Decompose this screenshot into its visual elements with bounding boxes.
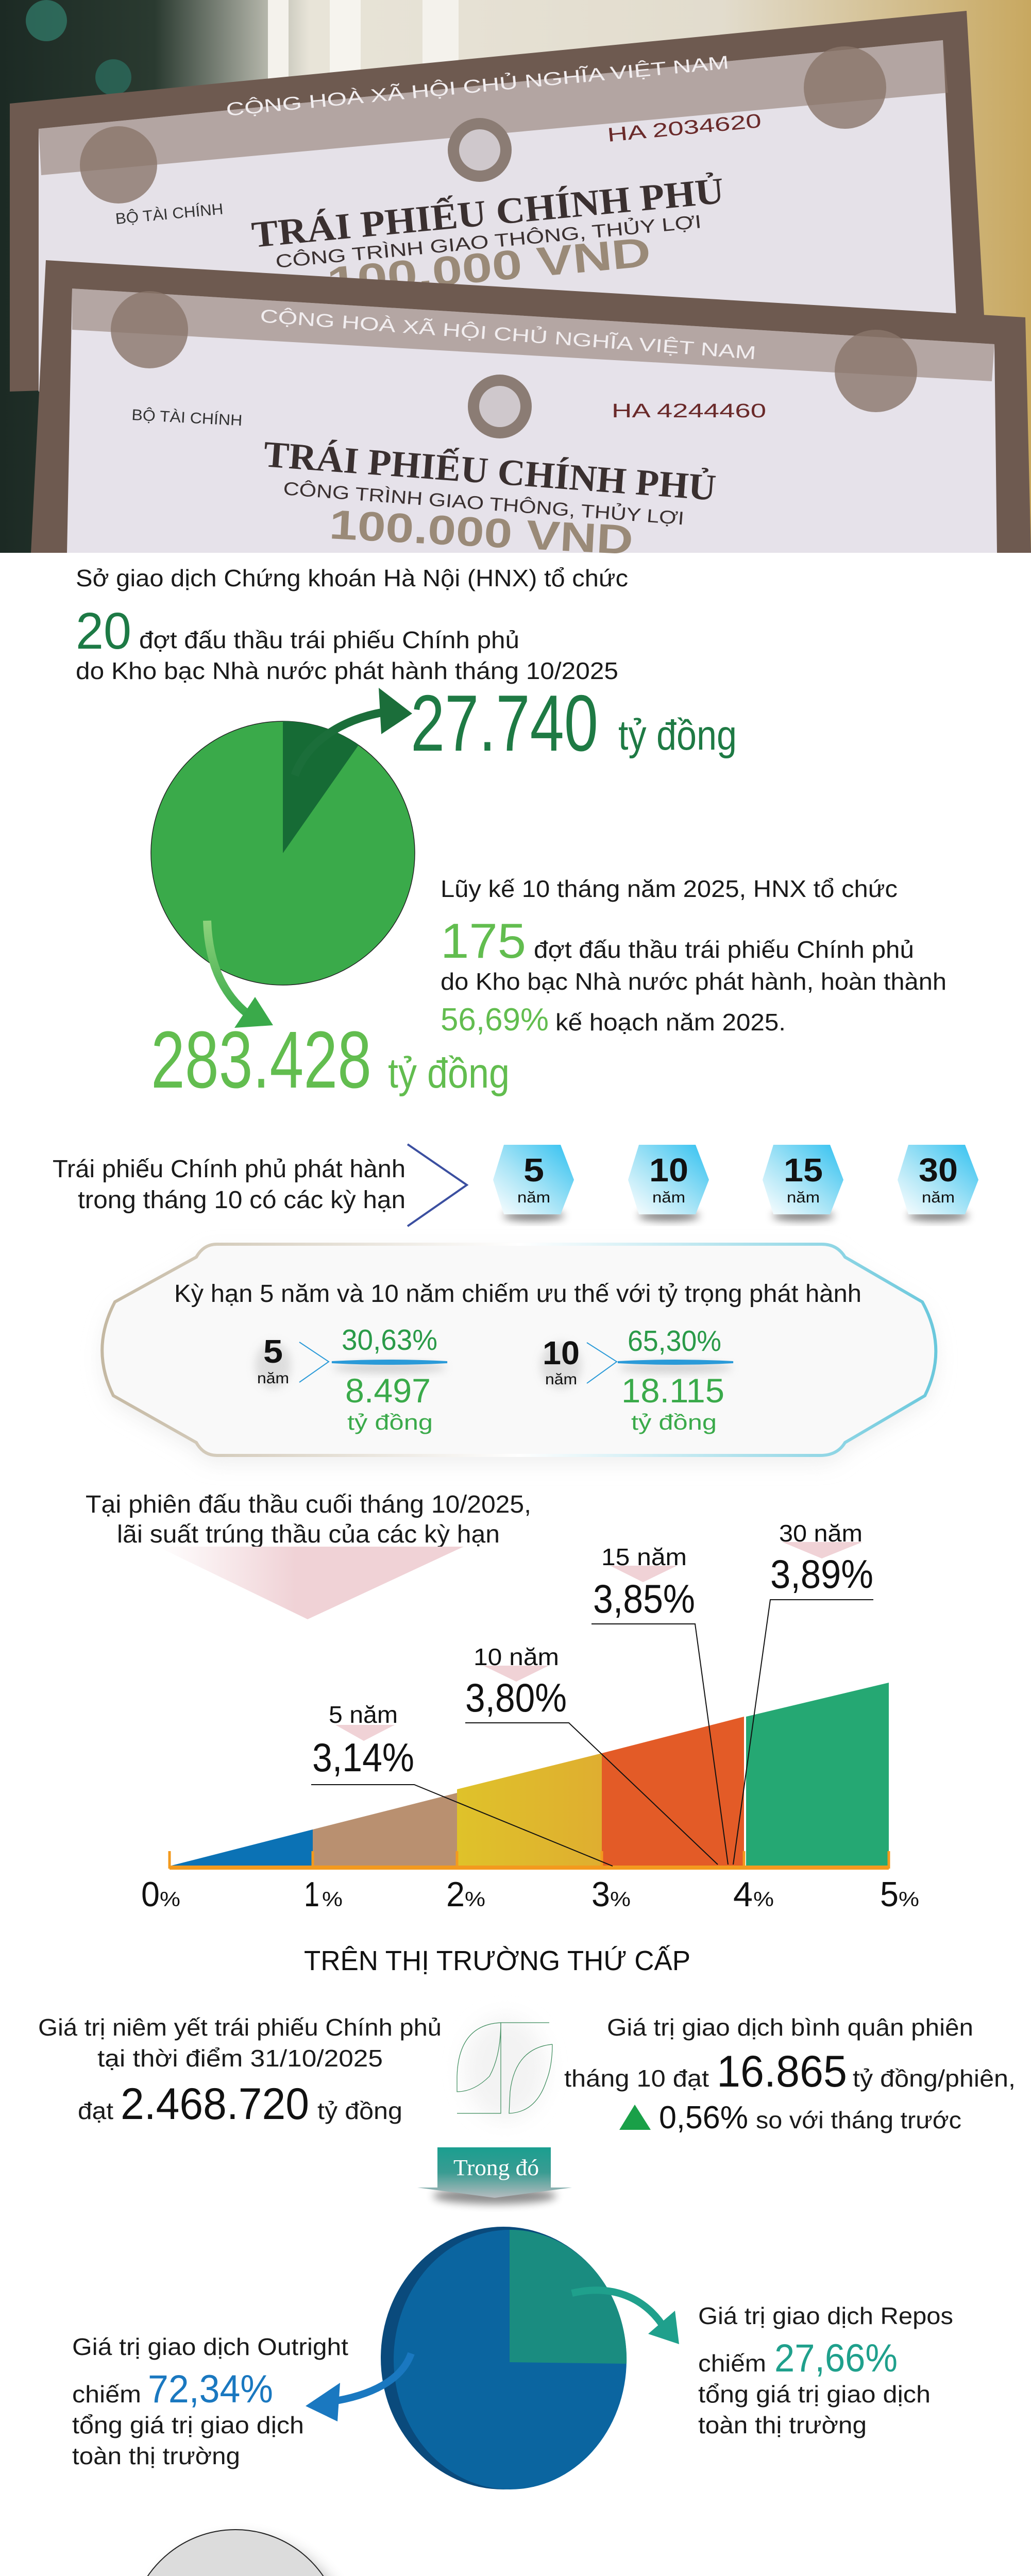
bond 2: CÔNG TRÌNH GIAO THÔNG, THỦY LỢI: [282, 477, 685, 529]
axis labels: %: [753, 1888, 774, 1911]
badge: 15 năm: [763, 1145, 843, 1221]
callout: 5 năm 3,14%: [311, 1701, 613, 1866]
axis labels: 4: [733, 1875, 753, 1914]
callout: 15 năm 3,85%: [591, 1544, 728, 1865]
badge: 30 năm: năm: [922, 1189, 955, 1206]
bond 2: TRÁI PHIẾU CHÍNH PHỦ: [262, 433, 717, 509]
text block: listed value: đạt: [78, 2097, 113, 2124]
text: cumulative 10 months: [441, 875, 947, 1038]
stat: 5 năm: 5: [263, 1333, 283, 1370]
axis labels: 5: [880, 1875, 899, 1914]
bond 2: BỘ TÀI CHÍNH: [131, 406, 243, 429]
pie chart: outright vs repos: [381, 2227, 627, 2489]
bond 1: HA 2034620: [606, 110, 763, 146]
axis labels: %: [610, 1888, 631, 1911]
bond 2: 100.000 VND: [328, 501, 634, 563]
bond 1: 100.000 VND: [325, 229, 653, 305]
text: bond terms: trong tháng 10 có các kỳ hạn: [78, 1187, 405, 1214]
big number: 27.740 tỷ đồng: tỷ đồng: [618, 712, 737, 759]
text: bond terms: Trái phiếu Chính phủ phát hành: [53, 1156, 405, 1183]
label: Trong đó: Trong đó: [453, 2155, 539, 2180]
text block: listed value: tại thời điểm 31/10/2025: [97, 2045, 383, 2072]
callout: 5 năm 3,14%: 5 năm: [329, 1701, 398, 1728]
heading: winning rates: Tại phiên đấu thầu cuối tháng 10/2025,: [86, 1491, 531, 1518]
text block: repos: toàn thị trường: [698, 2412, 867, 2438]
stat: 5 năm: 30,63%: [342, 1324, 437, 1357]
text block: outright: tổng giá trị giao dịch: [72, 2412, 304, 2438]
bond 2: CỘNG HOÀ XÃ HỘI CHỦ NGHĨA VIỆT NAM: [259, 304, 757, 363]
bond 1: CỘNG HOÀ XÃ HỘI CHỦ NGHĨA VIỆT NAM: [225, 51, 730, 120]
text block: average trading value: 0,56%: [659, 2100, 748, 2136]
heading: winning rates: [86, 1491, 531, 1548]
text: bond terms: [53, 1156, 405, 1214]
text block: average trading value: Giá trị giao dịch bình quân phiên: [607, 2014, 973, 2041]
bond 1: TRÁI PHIẾU CHÍNH PHỦ: [250, 170, 725, 256]
heading: winning rates: lãi suất trúng thầu của các kỳ hạn: [117, 1521, 500, 1548]
text block: listed value: Giá trị niêm yết trái phiếu Chính phủ: [38, 2014, 442, 2041]
text block: average trading value: 16.865: [717, 2047, 847, 2096]
callout: 15 năm 3,85%: 15 năm: [601, 1544, 687, 1570]
heading: HNX organized: do Kho bạc Nhà nước phát hành tháng 10/2025: [76, 657, 618, 684]
text block: average trading value: [564, 2014, 1016, 2136]
heading: HNX organized: 20: [76, 602, 131, 660]
axis labels: %: [160, 1888, 180, 1911]
axis labels: 2: [446, 1875, 465, 1914]
badge: 15 năm: 15: [784, 1151, 823, 1189]
text block: repos: tổng giá trị giao dịch: [698, 2381, 931, 2408]
text block: outright: Giá trị giao dịch Outright: [72, 2333, 348, 2360]
section heading: secondary market: TRÊN THỊ TRƯỜNG THỨ CẤP: [304, 1945, 690, 1976]
stat: 10 năm: 18.115: [621, 1371, 724, 1410]
text block: outright: [72, 2333, 348, 2469]
stat: 5 năm: năm: [257, 1370, 289, 1387]
badge: 5 năm: [493, 1145, 574, 1221]
text: cumulative 10 months: kế hoạch năm 2025.: [555, 1009, 786, 1036]
pie chart: foreign investors: [129, 2530, 355, 2576]
callout: 30 năm 3,89%: 3,89%: [770, 1551, 873, 1597]
big number: 27.740 tỷ đồng: 27.740: [411, 679, 598, 768]
text block: average trading value: tỷ đồng/phiên,: [853, 2065, 1016, 2092]
icon: pink triangle pointer: [158, 1547, 464, 1619]
arrow: chevron: [408, 1144, 467, 1226]
text block: average trading value: tháng 10 đạt: [564, 2065, 709, 2092]
text: cumulative 10 months: 175: [441, 913, 526, 969]
callout: 30 năm 3,89%: 30 năm: [779, 1520, 863, 1547]
bond 1: [10, 11, 987, 392]
text: cumulative 10 months: do Kho bạc Nhà nước phát hành, hoàn thành: [441, 968, 947, 995]
callout: 30 năm 3,89%: [733, 1520, 873, 1865]
arrow: to 27.740: [295, 688, 412, 775]
badge: 30 năm: [898, 1145, 978, 1221]
text: cumulative 10 months: 56,69%: [441, 1002, 549, 1038]
bond 1: BỘ TÀI CHÍNH: [114, 200, 224, 228]
text block: repos: 27,66%: [774, 2336, 898, 2380]
text block: repos: [698, 2302, 953, 2438]
stat: 10 năm: [540, 1325, 733, 1434]
heading: HNX organized: Sở giao dịch Chứng khoán Hà Nội (HNX) tổ chức: [76, 565, 628, 591]
bond 2: [31, 260, 1031, 563]
stat: 5 năm: tỷ đồng: [347, 1410, 433, 1434]
axis: [170, 1851, 889, 1869]
icon: up triangle: [619, 2105, 651, 2130]
badge: 30 năm: 30: [919, 1151, 958, 1189]
text block: listed value: tỷ đồng: [317, 2097, 402, 2124]
axis labels: 1: [304, 1875, 319, 1914]
text block: listed value: [38, 2014, 442, 2129]
callout: 5 năm 3,14%: 3,14%: [312, 1735, 414, 1780]
text block: outright: chiếm: [72, 2381, 141, 2408]
badge: 10 năm: [628, 1145, 709, 1221]
big number: 283.428 tỷ đồng: tỷ đồng: [388, 1050, 510, 1097]
heading: HNX organized: đợt đấu thầu trái phiếu Chính phủ: [139, 626, 519, 653]
callout: 10 năm 3,80%: 10 năm: [474, 1643, 559, 1670]
stat: 10 năm: năm: [545, 1371, 577, 1388]
big number: 283.428 tỷ đồng: 283.428: [151, 1015, 371, 1105]
badges: terms 5/10/15/30: [493, 1145, 978, 1221]
axis labels: [141, 1875, 919, 1914]
badge: 5 năm: 5: [523, 1151, 544, 1189]
text block: listed value: 2.468.720: [121, 2079, 309, 2129]
panel heading: Kỳ hạn 5 năm và 10 năm chiếm ưu thế với tỷ trọng phát hành: [174, 1280, 861, 1308]
stat: 10 năm: 65,30%: [628, 1325, 721, 1358]
stat: 10 năm: tỷ đồng: [631, 1410, 717, 1434]
badge: 10 năm: năm: [652, 1189, 685, 1206]
stat: 10 năm: 10: [543, 1334, 580, 1371]
axis labels: %: [322, 1888, 343, 1911]
axis labels: %: [899, 1888, 919, 1911]
text: cumulative 10 months: Lũy kế 10 tháng năm 2025, HNX tổ chức: [441, 875, 898, 902]
label: Trong đó: [417, 2147, 572, 2204]
icon: decorative swirl: [457, 2017, 552, 2120]
text block: average trading value: so với tháng trước: [756, 2107, 961, 2133]
stat: 5 năm: [255, 1324, 447, 1434]
heading: HNX organized: [76, 565, 628, 684]
badge: 15 năm: năm: [787, 1189, 820, 1206]
stat: 5 năm: 8.497: [345, 1371, 431, 1410]
callout: 10 năm 3,80%: 3,80%: [465, 1675, 567, 1720]
text block: repos: Giá trị giao dịch Repos: [698, 2302, 953, 2329]
callout: 15 năm 3,85%: 3,85%: [593, 1576, 695, 1621]
callout: 10 năm 3,80%: [465, 1643, 718, 1865]
text: cumulative 10 months: đợt đấu thầu trái phiếu Chính phủ: [534, 936, 914, 963]
bond 2: HA 4244460: [612, 400, 766, 422]
axis labels: 0: [141, 1875, 160, 1914]
chart: interest rate wedge: [141, 1683, 919, 1914]
photo: government bonds: [0, 0, 1031, 563]
arrow: to 283.428: [207, 921, 273, 1028]
panel: 5 and 10 year share: [102, 1244, 936, 1463]
badge: 10 năm: 10: [649, 1151, 688, 1189]
text block: outright: toàn thị trường: [72, 2443, 240, 2469]
text block: outright: 72,34%: [148, 2367, 273, 2411]
text block: repos: chiếm: [698, 2350, 766, 2377]
arrow: to repos: [572, 2290, 679, 2344]
badge: 5 năm: năm: [517, 1189, 550, 1206]
arrow: to outright: [306, 2353, 411, 2421]
bond 1: CÔNG TRÌNH GIAO THÔNG, THỦY LỢI: [275, 210, 702, 272]
axis labels: %: [465, 1888, 485, 1911]
pie chart: month vs cumulative: [151, 721, 415, 985]
axis labels: 3: [591, 1875, 610, 1914]
